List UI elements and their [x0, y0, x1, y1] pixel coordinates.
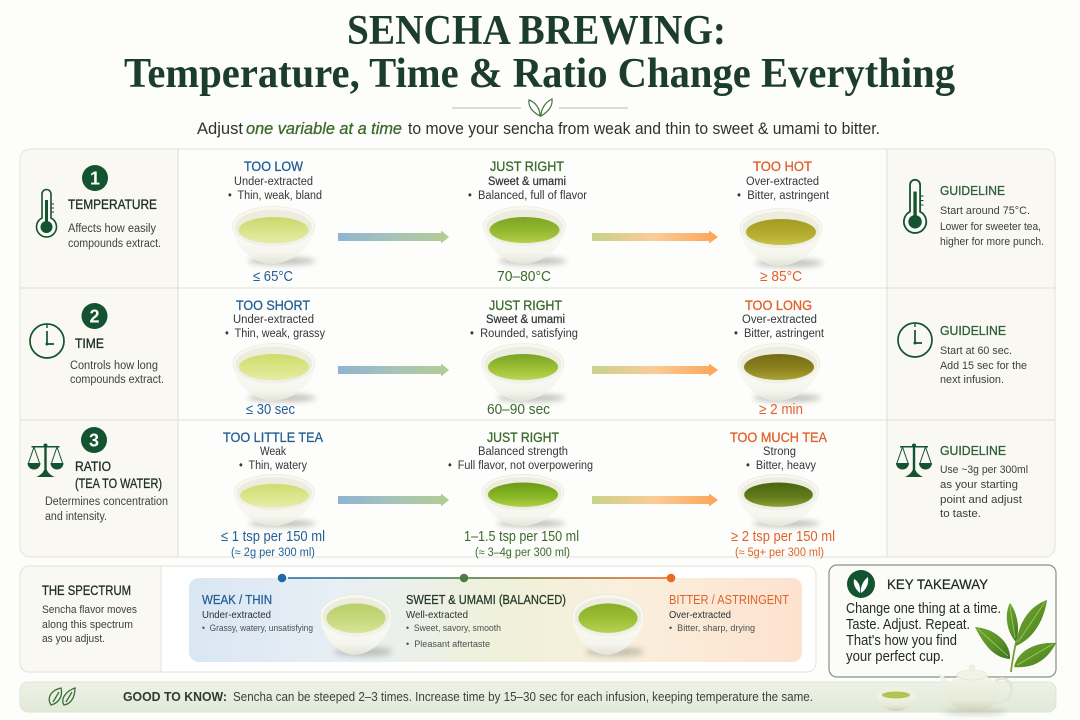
- description: time: [70, 360, 164, 386]
- subtitle: to move your sencha from weak and thin to sweet & umami to bitter.: [408, 120, 880, 138]
- panel: main variable table: [20, 149, 1055, 559]
- heading: ratio: [75, 459, 162, 491]
- row: temperature too hot: TOO HOT: [753, 159, 812, 174]
- guideline: temperature: Lower for sweeter tea,: [940, 221, 1041, 233]
- icon: thermometer: [36, 190, 56, 237]
- row: temperature too hot: ≥ 85°C: [760, 269, 802, 285]
- description: temperature: [68, 223, 161, 250]
- description: time: Controls how long: [70, 360, 158, 372]
- row: time too short: ≤ 30 sec: [246, 402, 295, 418]
- subtitle: one variable at a time: [246, 120, 402, 138]
- title divider with leaf icon: [452, 99, 628, 116]
- row: ratio too much: • Bitter, heavy: [746, 460, 816, 472]
- arrow: temperature low to right: [338, 230, 449, 244]
- guideline: temperature: higher for more punch.: [940, 236, 1044, 248]
- spectrum gradient band: [189, 578, 802, 662]
- takeaway message: [846, 601, 1001, 665]
- row: temperature just right: JUST RIGHT: [490, 159, 564, 174]
- guideline: ratio: [896, 444, 1028, 520]
- icon: balanced tea bowl: [484, 206, 566, 265]
- row: ratio just right: (≈ 3–4g per 300 ml): [475, 547, 570, 559]
- row: ratio too little: • Thin, watery: [239, 460, 307, 472]
- heading: time: TIME: [75, 336, 104, 351]
- row: temperature just right: Sweet & umami: [488, 176, 566, 188]
- number badge 2: 2: [89, 306, 100, 326]
- arrow: time right to long: [592, 364, 718, 376]
- spectrum: sweet and umami: • Pleasant aftertaste: [406, 639, 490, 649]
- panel: good to know: [20, 682, 1056, 712]
- row: time label: [30, 303, 164, 386]
- guideline: temperature: [904, 180, 1044, 248]
- spectrum: sweet and umami: • Sweet, savory, smooth: [406, 623, 501, 633]
- row: time too long: [734, 298, 825, 418]
- guideline: ratio: as your starting: [940, 479, 1018, 491]
- row: time just right: • Rounded, satisfying: [470, 328, 578, 340]
- icon: two leaves: [49, 688, 75, 705]
- guideline: temperature: GUIDELINE: [940, 184, 1005, 198]
- spectrum: bitter astringent: [669, 592, 789, 633]
- number badge 1: 1: [90, 168, 100, 188]
- row: temperature too low: TOO LOW: [244, 159, 303, 174]
- spectrum: weak thin: Under-extracted: [202, 610, 271, 621]
- icon: pale tea bowl: [232, 206, 316, 265]
- spectrum: bitter astringent: • Bitter, sharp, drying: [669, 623, 755, 633]
- icon: small tea cup: [876, 688, 916, 711]
- title: [124, 8, 955, 97]
- row: ratio just right: • Full flavor, not overpowering: [448, 460, 593, 472]
- title: Temperature, Time & Ratio Change Everything: [124, 51, 955, 97]
- row: time too short: • Thin, weak, grassy: [225, 328, 325, 340]
- takeaway message: your perfect cup.: [846, 649, 944, 665]
- description: ratio: [45, 496, 168, 523]
- row: ratio too much: Strong: [763, 446, 796, 458]
- row: ratio too much: (≈ 5g+ per 300 ml): [735, 547, 824, 559]
- icon: hot tea bowl: [740, 208, 823, 267]
- description: time: compounds extract.: [70, 374, 164, 386]
- row: time just right: [470, 298, 578, 418]
- row: temperature label: [36, 165, 161, 250]
- icon: pale tea bowl: [233, 344, 316, 402]
- spectrum: weak thin: • Grassy, watery, unsatisfying: [202, 623, 313, 633]
- icon: clock: [30, 324, 64, 358]
- guideline: ratio: point and adjust: [940, 494, 1022, 506]
- icon: spectrum balanced bowl: [572, 595, 645, 656]
- panel: the spectrum: [20, 566, 816, 672]
- row: time just right: JUST RIGHT: [489, 298, 562, 313]
- icon: spectrum pale bowl: [320, 595, 393, 656]
- spectrum: sweet and umami: SWEET & UMAMI (BALANCED): [406, 592, 566, 607]
- row: temperature just right: • Balanced, full of flavor: [468, 190, 587, 202]
- guideline: ratio: Use ~3g per 300ml: [940, 464, 1028, 476]
- row: time too short: Under-extracted: [233, 314, 314, 326]
- icon: balanced tea bowl: [482, 344, 565, 402]
- subtitle: Adjust: [197, 120, 243, 138]
- spectrum: sweet and umami: Well-extracted: [406, 610, 468, 621]
- heading: ratio: (TEA TO WATER): [75, 476, 162, 491]
- heading: ratio: RATIO: [75, 459, 111, 474]
- row: ratio too little: ≤ 1 tsp per 150 ml: [221, 529, 325, 545]
- spectrum: bitter astringent: Over-extracted: [669, 610, 731, 621]
- icon: balanced tea bowl: [482, 474, 565, 527]
- guideline: time: Add 15 sec for the: [940, 360, 1027, 372]
- guideline: ratio: to taste.: [940, 508, 981, 520]
- good to know text: Sencha can be steeped 2–3 times. Increase time by 15–30 sec for each infusion, keeping temperature the same.: [233, 690, 813, 704]
- row: ratio just right: JUST RIGHT: [487, 430, 559, 445]
- row: time too short: TOO SHORT: [236, 298, 310, 313]
- row: temperature too hot: Over-extracted: [746, 176, 819, 188]
- arrow: time short to right: [338, 364, 449, 376]
- guideline: time: Start at 60 sec.: [940, 345, 1012, 357]
- row: time just right: 60–90 sec: [487, 402, 550, 418]
- row: time just right: Sweet & umami: [486, 314, 565, 326]
- row: ratio too little: Weak: [260, 446, 286, 458]
- row: ratio too much: ≥ 2 tsp per 150 ml: [731, 529, 835, 545]
- row: ratio just right: Balanced strength: [478, 446, 568, 458]
- description: the spectrum: along this spectrum: [42, 619, 133, 631]
- row: temperature just right: [468, 159, 587, 285]
- icon: tea leaves: [975, 600, 1056, 672]
- row: temperature too low: Under-extracted: [234, 176, 313, 188]
- number badge 3: [81, 427, 107, 453]
- guideline: temperature: Start around 75°C.: [940, 205, 1030, 217]
- spectrum: weak thin: WEAK / THIN: [202, 592, 272, 607]
- takeaway message: That's how you find: [846, 633, 957, 649]
- description: ratio: and intensity.: [45, 511, 107, 523]
- row: temperature too hot: • Bitter, astringent: [737, 190, 830, 202]
- row: time too long: ≥ 2 min: [759, 402, 803, 418]
- heading: key takeaway: KEY TAKEAWAY: [887, 576, 989, 592]
- row: time too long: • Bitter, astringent: [734, 328, 825, 340]
- arrow: ratio little to right: [338, 494, 449, 506]
- number badge 3: 3: [89, 430, 99, 450]
- takeaway message: Taste. Adjust. Repeat.: [846, 617, 970, 633]
- icon: leaf badge: [847, 570, 875, 598]
- arrow: temperature right to hot: [592, 230, 718, 244]
- description: the spectrum: [42, 604, 137, 645]
- row: ratio too much: [730, 430, 835, 559]
- row: time too short: [225, 298, 325, 418]
- spectrum: bitter astringent: BITTER / ASTRINGENT: [669, 592, 789, 607]
- description: the spectrum: Sencha flavor moves: [42, 604, 137, 616]
- description: the spectrum: as you adjust.: [42, 633, 105, 645]
- description: temperature: compounds extract.: [68, 238, 161, 250]
- icon: dark tea bowl: [738, 344, 821, 402]
- row: temperature too low: • Thin, weak, bland: [228, 190, 322, 202]
- subtitle: [197, 120, 880, 138]
- icon: dark tea bowl: [738, 474, 820, 527]
- icon: pale tea bowl: [234, 474, 316, 527]
- arrow: ratio right to much: [592, 494, 718, 506]
- row: temperature too low: ≤ 65°C: [253, 269, 293, 285]
- guideline: time: next infusion.: [940, 374, 1004, 386]
- row: ratio too little: TOO LITTLE TEA: [223, 430, 323, 445]
- row: ratio label: [28, 427, 168, 523]
- spectrum: weak thin: [202, 592, 313, 633]
- guideline: time: GUIDELINE: [940, 324, 1006, 338]
- spectrum: sweet and umami: [406, 592, 566, 649]
- row: time too long: TOO LONG: [745, 298, 812, 313]
- description: ratio: Determines concentration: [45, 496, 168, 508]
- row: temperature too low: [228, 159, 322, 285]
- heading: the spectrum: THE SPECTRUM: [42, 583, 131, 598]
- heading: temperature: TEMPERATURE: [68, 197, 157, 212]
- row: ratio too little: [221, 430, 325, 559]
- takeaway message: Change one thing at a time.: [846, 601, 1001, 617]
- row: temperature too hot: [737, 159, 830, 285]
- icon: balance scale: [28, 444, 64, 477]
- icon: teapot: [937, 664, 1012, 715]
- panel: key takeaway: [829, 565, 1056, 677]
- guideline: ratio: GUIDELINE: [940, 444, 1006, 458]
- left and right column backgrounds: [20, 149, 1055, 557]
- spectrum line and markers: [278, 574, 675, 582]
- guideline: time: [898, 323, 1027, 386]
- row: ratio just right: [448, 430, 593, 559]
- title: SENCHA BREWING:: [347, 8, 726, 54]
- row: temperature just right: 70–80°C: [497, 269, 551, 285]
- row: ratio just right: 1–1.5 tsp per 150 ml: [464, 529, 579, 545]
- description: temperature: Affects how easily: [68, 223, 156, 235]
- good to know text: GOOD TO KNOW:: [123, 690, 227, 704]
- row: time too long: Over-extracted: [742, 314, 817, 326]
- row: ratio too much: TOO MUCH TEA: [730, 430, 827, 445]
- row: ratio too little: (≈ 2g per 300 ml): [231, 547, 315, 559]
